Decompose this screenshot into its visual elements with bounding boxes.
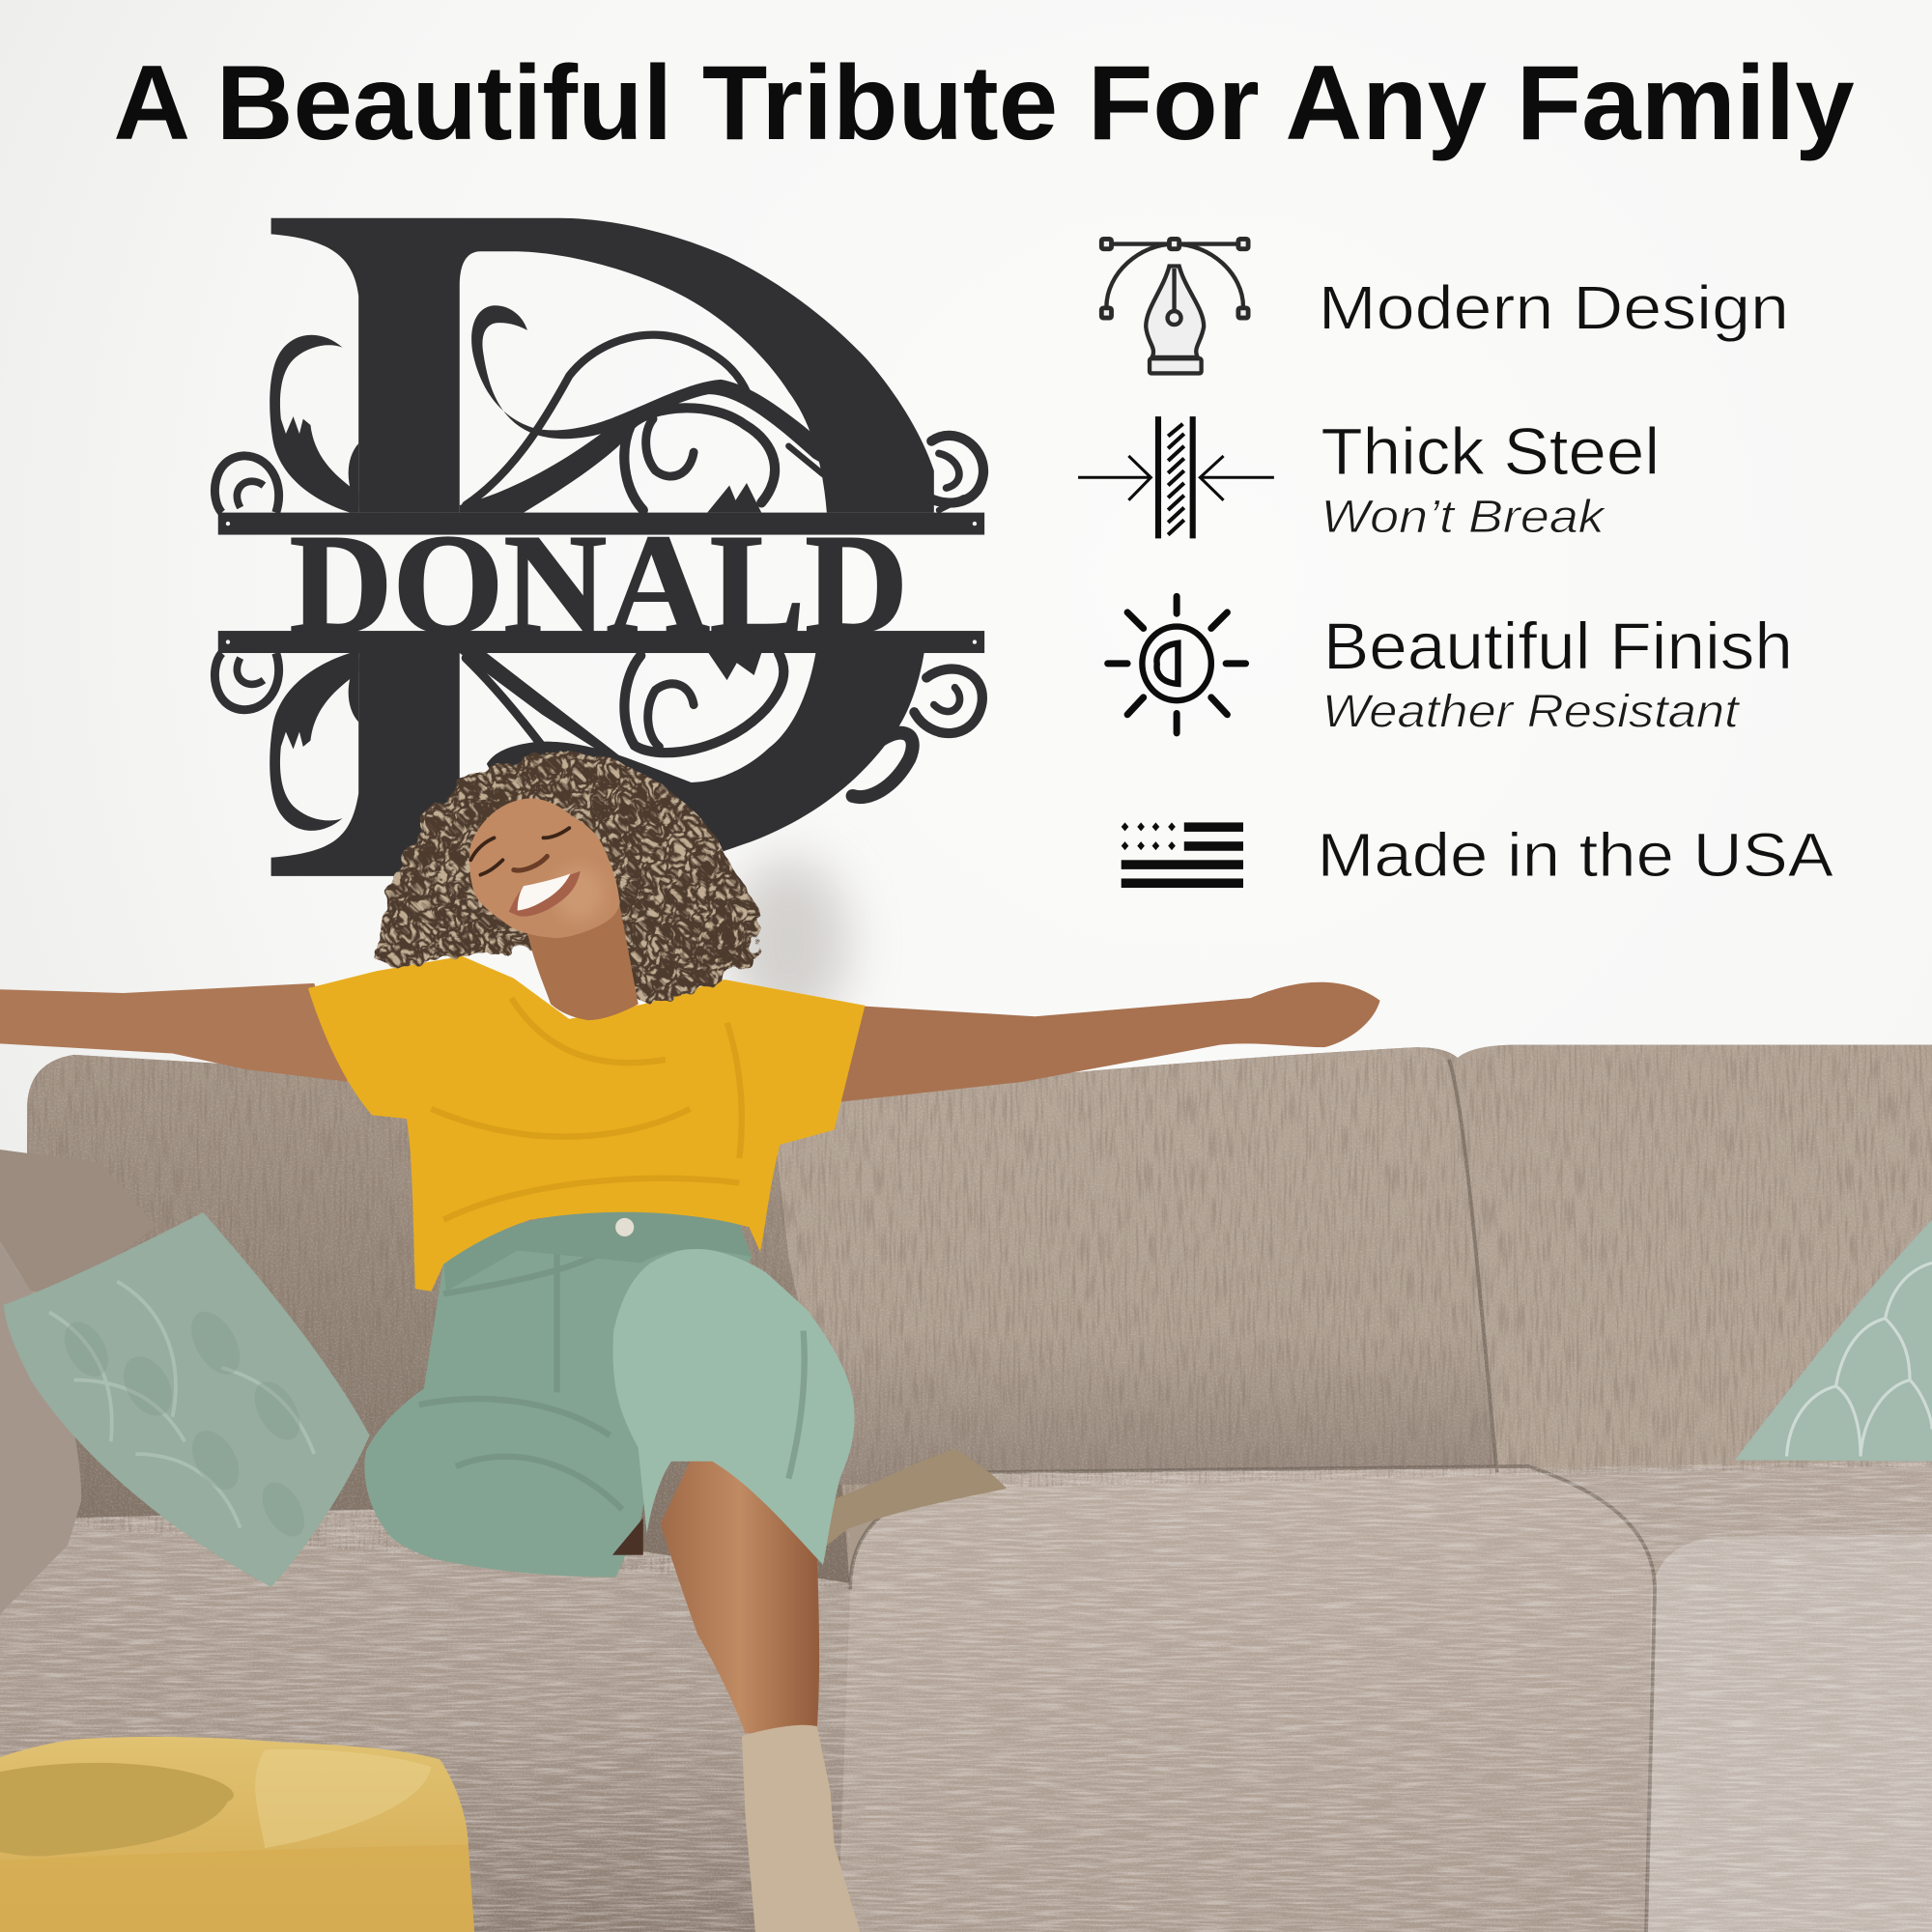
trousers right leg	[613, 1249, 854, 1565]
smile	[509, 871, 581, 917]
left flourish upper	[214, 335, 358, 513]
sofa right seat	[1503, 1460, 1932, 1559]
text: Made in the USA: Made in the USA	[1318, 820, 1833, 890]
teeth	[518, 873, 571, 911]
nose	[514, 856, 547, 870]
sofa middle back cushion	[777, 1047, 1497, 1485]
monogram sign: D with DONALD	[214, 218, 984, 876]
text: Beautiful Finish: Beautiful Finish	[1323, 610, 1793, 684]
photo: yellow ottoman	[0, 1737, 474, 1932]
main swirl in upper counter	[471, 305, 831, 469]
photo: green pillow right	[1735, 1220, 1932, 1462]
shadow notch under knee	[612, 1518, 643, 1555]
text: Won't Break: Won’t Break	[1321, 491, 1607, 543]
sofa back texture	[0, 1035, 1932, 1602]
monogram bowl lower	[487, 653, 924, 856]
photo: woman	[0, 739, 1380, 1932]
monogram letter D upper	[271, 218, 934, 513]
monogram stem lower	[271, 653, 460, 876]
wedge below lower bar	[460, 653, 622, 757]
other foot	[823, 1449, 1007, 1547]
icon: USA flag	[1122, 822, 1243, 888]
photo: sofa	[0, 1035, 1932, 1932]
leaf tip on lower scroll	[708, 653, 761, 680]
right scroll lower	[914, 669, 982, 733]
eyes and brows	[470, 828, 569, 875]
neck	[524, 906, 639, 1020]
icon: thick steel arrows	[1078, 416, 1274, 538]
photo: green pillow left	[4, 1212, 370, 1587]
cheek highlight	[554, 867, 604, 921]
leg skin	[661, 1462, 819, 1734]
icon: sun finish	[1108, 596, 1246, 733]
waistband	[443, 1210, 752, 1292]
sofa chaise	[1646, 1534, 1932, 1932]
lower bar	[218, 631, 984, 653]
photo: right pillow quilting	[1786, 1263, 1932, 1457]
leaf tip on upper scroll	[707, 483, 761, 513]
sofa seams	[850, 1060, 1655, 1932]
hair	[374, 751, 761, 1005]
text: Weather Resistant: Weather Resistant	[1322, 686, 1741, 738]
flourishes in lower counter	[466, 658, 569, 782]
photo: sofa left arm	[0, 1242, 81, 1614]
trouser button	[615, 1218, 634, 1236]
photo: pillow dark scallops	[55, 1303, 313, 1544]
sofa base	[0, 1045, 1932, 1932]
text: Thick Steel: Thick Steel	[1321, 414, 1660, 489]
shirt	[308, 956, 865, 1292]
left flourish lower	[214, 653, 358, 831]
face	[469, 799, 620, 938]
wall shadow behind person	[727, 856, 850, 1029]
arm right	[832, 982, 1380, 1103]
sofa seat texture	[0, 1454, 1932, 1932]
sofa middle seat	[838, 1466, 1655, 1932]
wedge from bar into swirl	[460, 419, 639, 513]
sofa left seat	[0, 1509, 863, 1932]
sock	[742, 1725, 860, 1932]
arm left	[0, 983, 348, 1082]
trousers left leg and hip	[364, 1210, 752, 1577]
name DONALD: DONALD	[290, 505, 908, 664]
title: A Beautiful Tribute For Any Family	[113, 44, 1855, 162]
sofa left back cushion	[27, 1055, 850, 1589]
icon: pen tool	[1101, 239, 1248, 373]
photo: pillow quilting	[49, 1282, 314, 1528]
shirt folds	[431, 998, 742, 1220]
photo: taupe throw pillow	[0, 1150, 156, 1292]
upper bar	[218, 513, 984, 535]
right scroll upper	[931, 436, 983, 503]
sofa right back cushion	[1449, 1045, 1932, 1476]
rivets	[226, 522, 977, 644]
thin vine strokes and scrolls	[466, 335, 983, 797]
trouser shading	[419, 1238, 805, 1509]
text: Modern Design: Modern Design	[1319, 273, 1789, 343]
